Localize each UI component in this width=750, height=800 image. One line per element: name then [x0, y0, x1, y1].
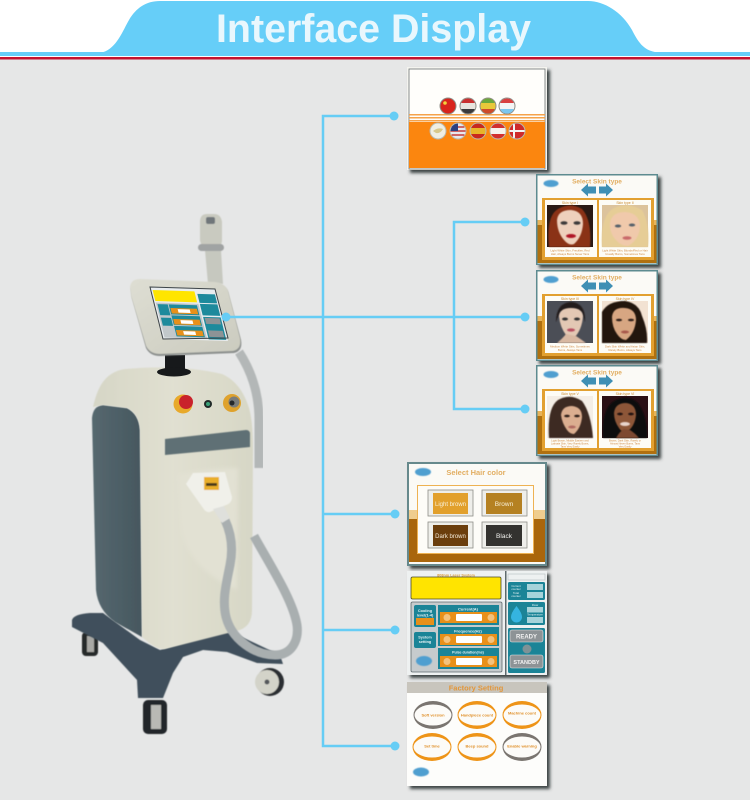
handle on top of the machine	[198, 214, 224, 284]
ready and standby block: STANDBY	[513, 660, 540, 666]
swatch: black: Black	[496, 533, 513, 540]
card: skin type IV	[599, 296, 651, 353]
card: skin type III: Skin type III	[561, 297, 579, 301]
lower cable	[224, 520, 297, 655]
swatch: dark brown	[428, 522, 473, 548]
option: soft version: Soft version	[421, 712, 445, 718]
card: skin type III: Medium White Skin, Sometimes	[550, 344, 590, 348]
cooling level button	[414, 605, 436, 627]
card: skin type IV: Dark Skin White and Asian Skin,	[605, 344, 645, 348]
counter block: Total	[513, 591, 519, 595]
pulse duration control	[438, 648, 499, 669]
body	[93, 367, 253, 649]
header banner	[0, 0, 750, 60]
card: skin type V: Light Brown, Middle Eastern and	[551, 438, 589, 442]
card: skin type I: Light White Skin, Freckles, Red	[550, 248, 590, 252]
option: handpiece count: Handpiece count	[461, 712, 494, 718]
handpiece recess	[178, 468, 238, 590]
card: skin type I	[545, 200, 597, 257]
machine illustration	[72, 214, 297, 734]
frequency control	[438, 627, 499, 646]
panel: skin types V and VI	[536, 365, 661, 459]
logo	[544, 276, 558, 283]
card: skin type VI: Brown, Dark Skin, Rarely or	[609, 438, 641, 442]
panel: language selection	[407, 67, 550, 173]
swatch: brown: Brown	[495, 501, 514, 508]
connector lines	[225, 116, 525, 746]
panel: skin types I and II	[536, 174, 661, 268]
card: skin type VI	[599, 391, 651, 448]
handle slot	[165, 430, 250, 455]
neck	[157, 355, 191, 376]
card: skin type II: Skin type II	[616, 201, 634, 205]
title: Interface Display	[216, 7, 531, 51]
base	[72, 613, 283, 698]
upper cable	[239, 352, 259, 468]
flags	[430, 98, 526, 140]
card: skin type V	[545, 391, 597, 448]
water flow block: Flow	[532, 603, 539, 607]
option: machine count: Machine count	[508, 710, 537, 716]
option: enable warning	[502, 733, 542, 761]
cooling level button: level(1-4)	[417, 614, 434, 618]
option: beep sound: Beep sound	[466, 744, 489, 748]
swatch: light brown	[428, 490, 473, 516]
card: skin type VI: Skin type VI	[616, 392, 634, 396]
logo	[544, 371, 558, 378]
water flow block: Temperature	[527, 612, 543, 616]
system setting button: setting	[419, 640, 432, 644]
card: skin type II: Light White Skin, Blonde/Red or Hair	[602, 248, 648, 252]
arrows	[581, 184, 613, 196]
card: skin type II: Usually Burns, Sometimes Tans	[605, 252, 645, 256]
header	[407, 682, 547, 693]
stop button	[174, 394, 193, 414]
counter block: Current	[511, 584, 521, 588]
heading: Factory Setting	[449, 684, 504, 692]
cooling level button: Cooling	[418, 609, 433, 613]
system setting button: System	[418, 636, 432, 640]
card: skin type III	[545, 296, 597, 353]
indicator light	[204, 400, 212, 408]
counter block	[508, 582, 545, 600]
heading: Select Skin type	[572, 178, 622, 186]
option: set time: Set time	[424, 744, 441, 748]
arrows	[581, 374, 613, 388]
panel: laser control interface	[407, 571, 550, 678]
heading: Select Skin type	[572, 274, 622, 282]
connector dots	[222, 112, 530, 750]
option: handpiece count	[458, 701, 496, 729]
card: skin type VI: Almost Never Burns, Tans	[610, 442, 641, 446]
heading: Select Skin type	[572, 370, 622, 376]
frequency control: Frequence(Hz)	[454, 628, 483, 634]
option: soft version	[414, 701, 452, 729]
card: skin type III: Burns, Always Tans	[558, 348, 583, 352]
swatch: dark brown: Dark brown	[435, 534, 466, 540]
pulse duration control: Pulse duration(ms)	[452, 650, 484, 654]
ready and standby block	[508, 628, 545, 673]
current control: Current(A)	[458, 606, 479, 612]
arrows	[581, 280, 613, 292]
key switch	[223, 394, 241, 412]
card: skin type II	[599, 200, 651, 257]
panel: hair colour selection	[407, 462, 550, 569]
card: skin type V: Latinate Skin, Very Rarely Burns,	[551, 442, 589, 446]
panel: skin types III and IV	[536, 270, 661, 364]
option: beep sound	[458, 733, 496, 761]
logo	[544, 180, 558, 187]
card: skin type IV: Rarely Burns, Always Tans	[608, 348, 642, 352]
handpiece	[186, 472, 232, 523]
mini interface on screen	[150, 287, 228, 341]
card: skin type V: Skin type V	[561, 392, 580, 396]
side panel	[92, 405, 142, 637]
logo	[416, 656, 432, 666]
current control	[438, 605, 499, 625]
water flow block	[508, 602, 545, 625]
logo	[415, 468, 431, 476]
swatch: black	[482, 522, 527, 548]
option: enable warning: Enable warning	[507, 744, 537, 748]
swatch: light brown: Light brown	[435, 502, 466, 508]
ready and standby block: READY	[516, 634, 537, 640]
card: skin type IV: Skin type IV	[616, 297, 635, 301]
card: skin type I: Skin type I	[562, 201, 578, 205]
card: skin type I: Hair, Always Burns Never Tans	[551, 252, 590, 256]
option: set time	[412, 733, 452, 761]
card: skin type V: Tans Very Easily	[560, 444, 580, 448]
counter block: counter	[511, 594, 521, 598]
heading: Select Hair color	[446, 468, 506, 477]
wheels	[82, 632, 284, 734]
system title: 808nm Laser System	[437, 574, 476, 578]
control screen head	[130, 279, 241, 356]
swatch: brown	[482, 490, 527, 516]
card: skin type VI: Very Easily	[619, 444, 632, 448]
logo	[413, 768, 429, 776]
panel: factory setting	[407, 682, 550, 789]
counter block: counter	[511, 587, 521, 591]
system setting button	[414, 632, 436, 648]
yellow display	[411, 577, 501, 599]
option: machine count	[502, 701, 542, 729]
